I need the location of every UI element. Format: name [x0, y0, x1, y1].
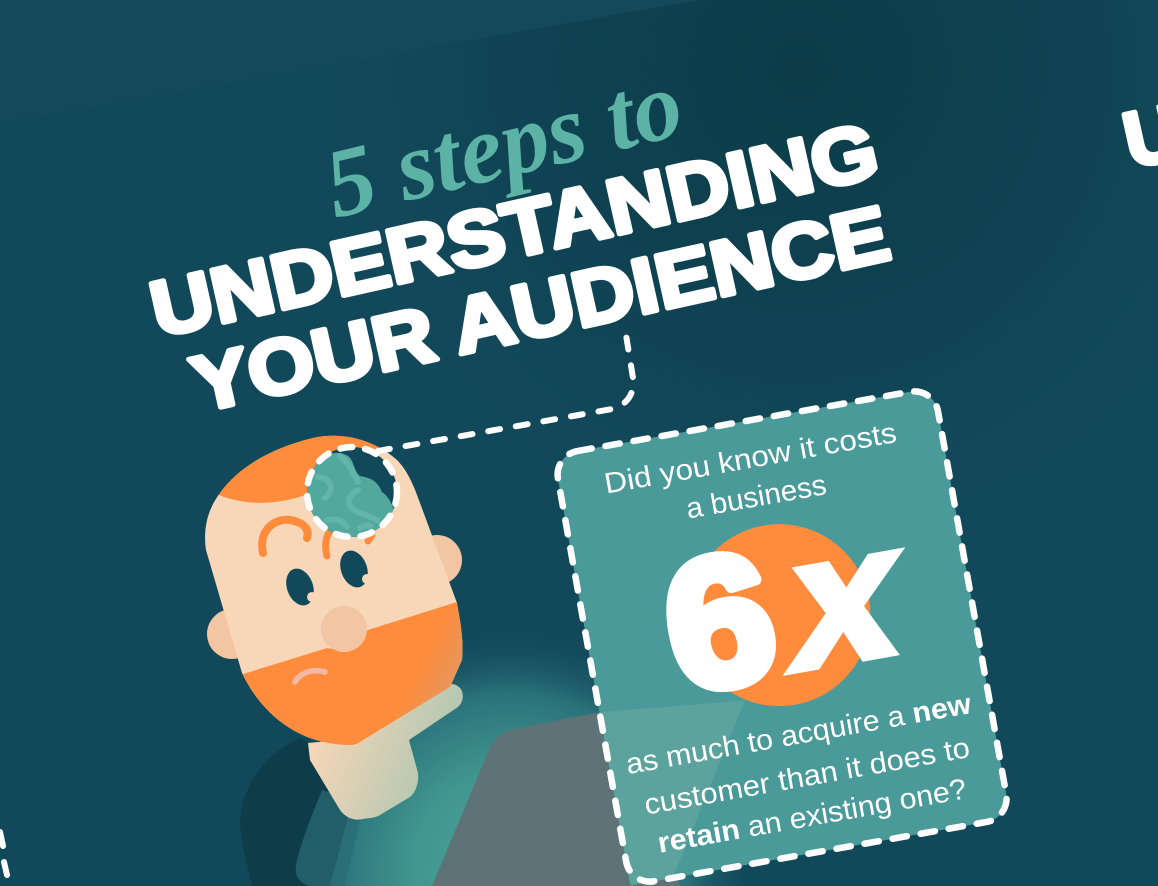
character head — [205, 420, 480, 820]
right ear — [412, 535, 462, 585]
screen glow — [200, 620, 760, 886]
intro text — [602, 417, 906, 539]
right eye — [335, 547, 373, 591]
beard — [242, 602, 463, 745]
character body — [240, 738, 360, 886]
left edge dashes — [0, 832, 7, 875]
left eyebrow — [262, 520, 308, 553]
mouth — [295, 671, 325, 682]
left ear — [207, 609, 257, 659]
orange circle — [674, 510, 885, 721]
big 6x stat — [649, 480, 943, 731]
right eyebrow — [326, 528, 372, 556]
intro text: Did you know it costs — [602, 417, 899, 500]
big 6x stat: x — [785, 480, 906, 713]
laptop through card — [600, 687, 773, 885]
title line 1: UNDERSTANDING — [143, 106, 886, 354]
closing text: customer than it does to — [642, 732, 972, 821]
callout card — [554, 388, 1010, 885]
nose — [321, 606, 367, 652]
card dashed border — [554, 388, 1010, 885]
title — [143, 50, 897, 429]
background top band — [0, 0, 700, 122]
closing text: as much to acquire a new — [623, 688, 974, 781]
neck — [308, 684, 463, 820]
closing text — [623, 688, 989, 863]
left eye — [281, 565, 319, 609]
brain dashed ring — [307, 447, 397, 537]
title line 2: YOUR AUDIENCE — [184, 189, 897, 429]
laptop — [432, 708, 680, 886]
card background — [554, 388, 1010, 885]
closing text: retain an existing one? — [655, 773, 969, 860]
brain — [307, 447, 396, 537]
title script line: 5 steps to — [315, 50, 692, 239]
dashed connector — [378, 335, 633, 451]
face — [205, 436, 463, 745]
intro text: a business — [684, 469, 829, 526]
big 6x stat: 6 — [649, 512, 790, 731]
hair — [218, 436, 380, 503]
